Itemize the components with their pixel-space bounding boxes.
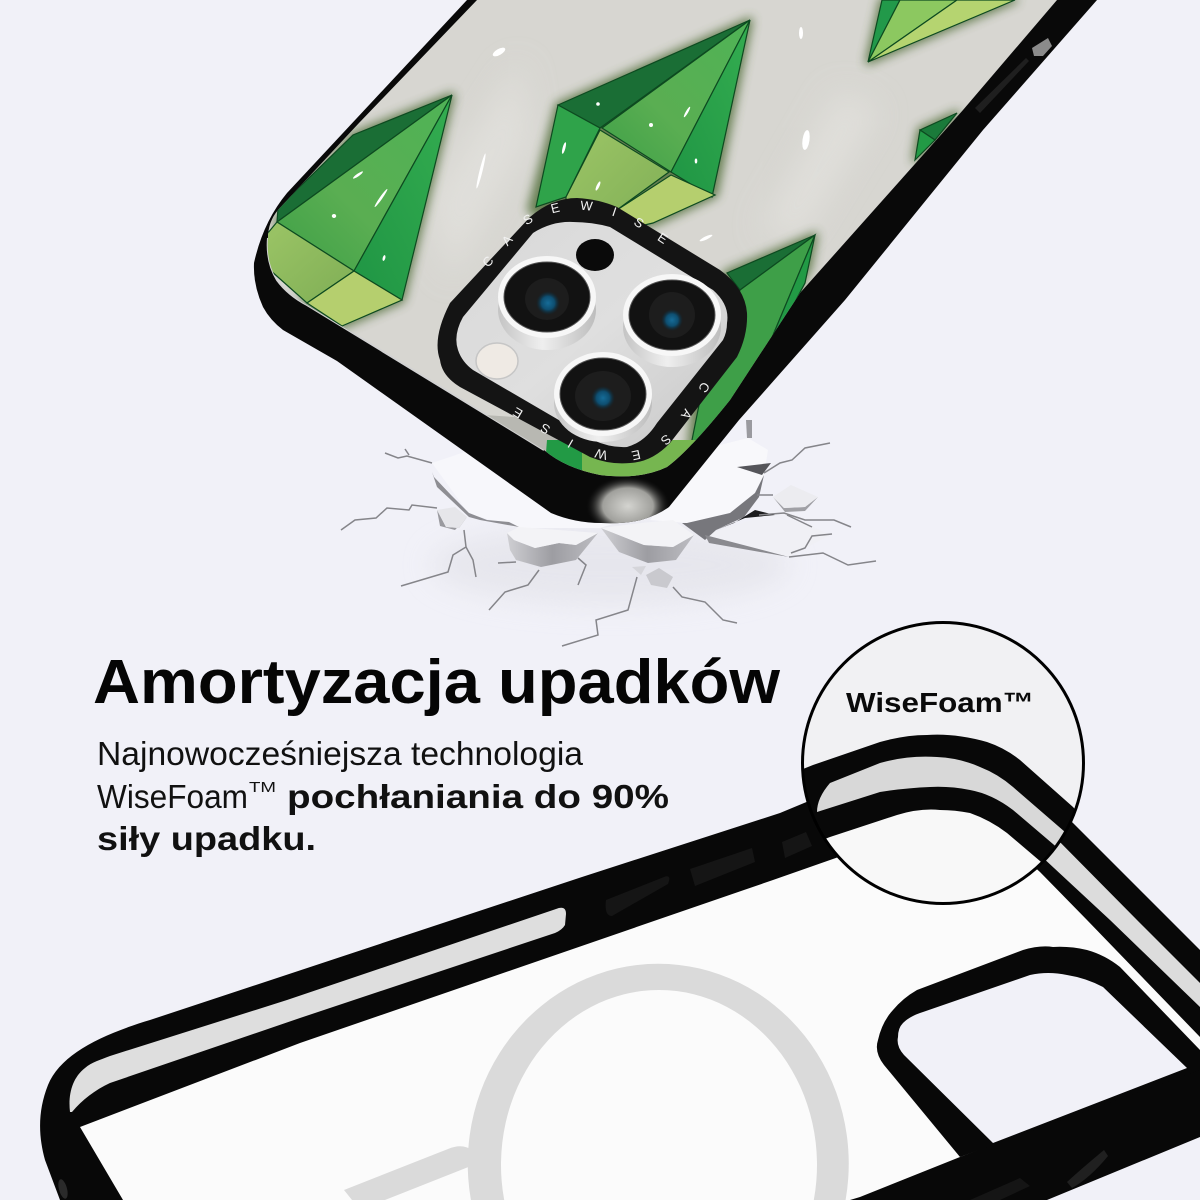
case frame [40,767,1200,1200]
gem edge right [915,113,957,160]
gem centre [536,20,750,240]
crack lines [341,443,876,646]
camera ring [438,198,747,463]
back panel [268,0,1057,476]
camera plate [456,222,727,447]
lens 2 [623,274,721,367]
description text: Najnowocześniejsza technologia [97,735,584,772]
flash [476,343,518,379]
gem lower right [690,235,815,450]
brand text bottom: CASEWISE [512,383,709,460]
foam strip right [1040,832,1200,1007]
description text [97,735,669,857]
gem strip under camera [546,440,582,470]
description text: TM [249,779,276,796]
brand text top: CASEWISE [484,200,668,266]
description text: WiseFoam [97,778,248,815]
soft panel highlights [448,116,850,227]
gems clipped to back panel [262,0,1015,480]
magnet ring [468,964,849,1200]
case bumper [254,0,1097,523]
camera cutout frame [877,946,1200,1157]
description text: siły upadku. [97,820,316,857]
foam strip left [70,908,566,1112]
callout label: WiseFoam™ [846,687,1034,718]
gem top right [868,0,1015,62]
lens 1 [498,256,596,350]
description text: pochłaniania do 90% [287,778,669,815]
side buttons [606,832,1108,1200]
clear case, inside view [40,767,1200,1200]
rubble chunks [507,533,598,567]
gem glow [277,0,1015,450]
magnified corner [804,734,1074,868]
gem left [262,95,452,326]
alignment bar [344,1146,478,1200]
bumper highlight [590,478,666,524]
side hole [57,1178,69,1200]
magnifier callout [801,621,1085,905]
lens 3 [554,352,652,442]
heading: Amortyzacja upadków [93,648,781,717]
camera cutout [898,973,1187,1143]
magnifier outline [802,622,1084,904]
clear back panel [80,830,1200,1200]
phone with case, back view [254,0,1097,536]
microphone hole [576,239,614,271]
silver reflection near lower edge [484,415,580,470]
inner rim highlight [268,238,544,450]
camera module [438,198,748,464]
sparkles [332,27,811,261]
cracked ground impact [341,420,876,646]
side button details [975,38,1052,113]
